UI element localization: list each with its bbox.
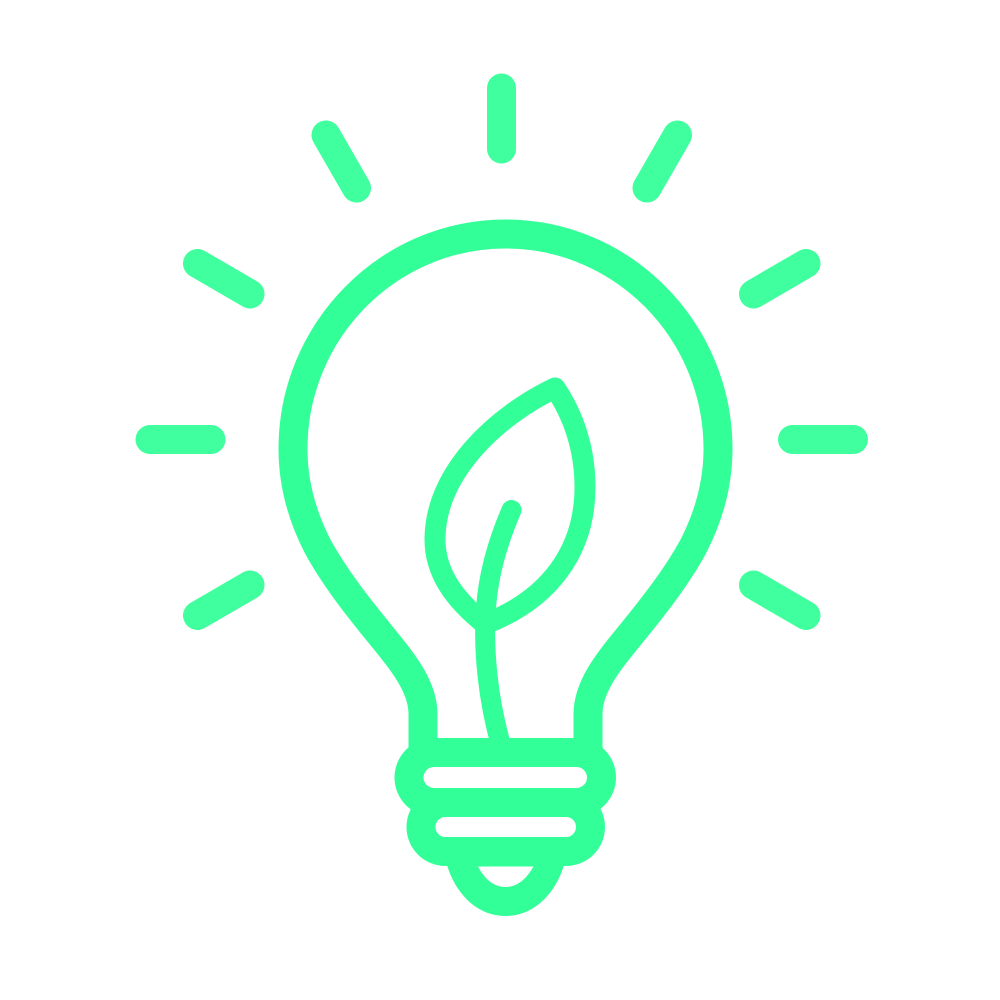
bulb glass outline xyxy=(293,234,718,752)
screw base xyxy=(409,752,602,916)
leaf stem xyxy=(485,510,512,745)
leaf xyxy=(435,388,585,745)
upper thread xyxy=(409,752,602,802)
bottom contact xyxy=(447,865,564,916)
rays around the bulb xyxy=(150,88,854,616)
lower thread xyxy=(421,802,590,852)
